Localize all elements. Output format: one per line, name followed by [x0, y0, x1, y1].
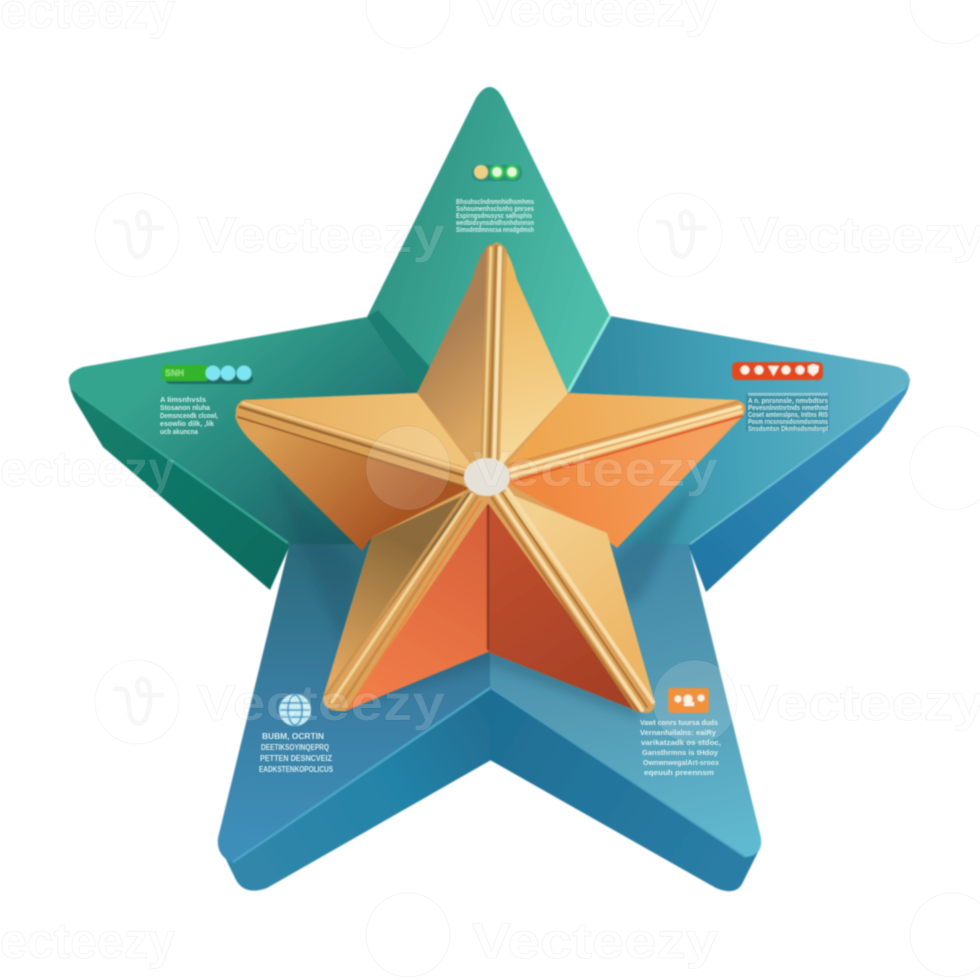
text block: DEETIKSOYINQEPRQ	[261, 743, 329, 752]
text block: eqeuuh preennsm	[644, 768, 714, 777]
text block: PETTEN DESNCVEIZ	[260, 754, 332, 763]
side face: lower right leg	[490, 686, 760, 891]
text block: wedbidsynsdndhsnhdsnnsn	[455, 218, 534, 227]
face: lower left inner	[345, 503, 488, 711]
top face: left arm	[69, 317, 490, 544]
face: left arm upper	[243, 393, 475, 470]
watermarks: Vecteezy	[740, 675, 980, 731]
text block: A Iimsnhvsls	[160, 395, 206, 404]
face: top arm left	[417, 243, 490, 470]
centre knob	[464, 458, 510, 496]
text block: nnnnnnnnnnnnnnnnnnnnnnnnnn	[748, 392, 828, 398]
centre fold between lower arms	[487, 505, 489, 650]
text block: esowlio dilk, ,lik	[160, 419, 215, 428]
text block	[259, 732, 334, 774]
ridge: top arm	[480, 243, 507, 474]
text block	[455, 197, 534, 234]
panel: left arm note	[160, 365, 253, 436]
text block: Gansthrmns is tHdoy	[642, 748, 719, 757]
side face: left arm	[69, 380, 290, 590]
text block: Coset amtenslpns, Inttns RIS	[748, 410, 828, 419]
face: right arm upper	[505, 393, 737, 468]
top face: right arm	[490, 316, 909, 544]
text block: Vernantuilalns: eaiRy	[640, 728, 717, 737]
text block	[640, 718, 721, 777]
text block: Sshoumenhsclsnhs pnrses	[456, 204, 534, 213]
face: lower right inner	[488, 503, 640, 712]
ridge: lower left arm	[326, 490, 481, 709]
watermarks: Vecteezy	[197, 207, 445, 263]
face: lower right outer	[500, 490, 655, 703]
text block: Posm rncsnsnsdsnmdsnmsns	[748, 417, 828, 426]
watermarks: Vecteezy	[472, 441, 718, 497]
text block: Bhsuhsclndnmnhidhsmhms	[456, 197, 534, 206]
text block: Stosanon nluha	[160, 403, 211, 412]
crease: upper left bevel	[367, 310, 440, 392]
text block: Vawt conrs tuursa duds	[640, 718, 718, 727]
ridge: right arm	[508, 402, 742, 481]
text block: OwnwnwegalArt-sroox	[643, 758, 720, 767]
icon: orange rating bar	[732, 362, 823, 380]
face: lower left outer	[323, 490, 475, 700]
ridge: lower right arm	[492, 489, 653, 711]
edge highlight: left arm	[78, 394, 288, 543]
panel: lower right note	[640, 688, 721, 777]
face: top arm right	[497, 243, 568, 470]
crease: upper right highlight	[568, 316, 610, 392]
watermarks: Vecteezy	[197, 675, 445, 731]
icon: green label with blue dots: SNH	[165, 368, 184, 378]
side face: lower left leg	[219, 686, 491, 891]
text block: EADKSTENKOPOLICUS	[259, 765, 334, 774]
top face: lower left leg	[218, 542, 490, 863]
text block: A n. pnrsnnsle, nmvbdtsrs	[748, 396, 828, 405]
edge highlight: lower left leg	[233, 688, 490, 862]
edge highlight: lower right leg	[491, 688, 745, 857]
watermarks: Vecteezy	[472, 913, 718, 969]
ridge: left arm	[238, 403, 466, 486]
orange 3D star	[235, 242, 745, 713]
icon: three dots	[472, 165, 522, 181]
side face: right arm	[688, 378, 910, 592]
text block: Pevesnlnntnrtnds nmethnd	[748, 403, 828, 412]
large 3D teal-blue star	[69, 87, 910, 891]
edge highlight: right arm	[690, 388, 905, 544]
panel: right arm note	[732, 362, 829, 433]
watermarks: ecteezy	[0, 441, 175, 497]
text block: ucb akuncna	[160, 427, 199, 436]
face: right arm lower	[505, 414, 743, 548]
text block	[746, 392, 829, 433]
watermarks: ecteezy	[0, 913, 175, 969]
text block: BUBM, OCRTIN	[262, 732, 324, 741]
text block: Espirngsdnusysc salhsphis	[456, 211, 532, 220]
base silhouette	[236, 242, 745, 713]
text block: Demsnceodk clcowl,	[160, 411, 218, 420]
panel: top tip note	[455, 165, 534, 234]
face: left arm lower	[235, 415, 470, 551]
top face: lower right leg	[490, 542, 761, 857]
shadow under orange star	[270, 470, 700, 720]
icon: globe	[279, 694, 311, 726]
panel: lower left note	[259, 694, 334, 774]
text block: varikatzadk os stdoc,	[641, 738, 721, 747]
watermarks: Vecteezy	[740, 207, 980, 263]
top face: upper leg	[367, 87, 610, 430]
text block: Simsdntdmnscsa nnsdgdmsh	[456, 225, 534, 234]
text block: Snsdsmtsn Dkmhsdsmdsnpl	[748, 424, 828, 433]
text block	[160, 395, 218, 436]
icon: orange badge	[668, 688, 709, 713]
